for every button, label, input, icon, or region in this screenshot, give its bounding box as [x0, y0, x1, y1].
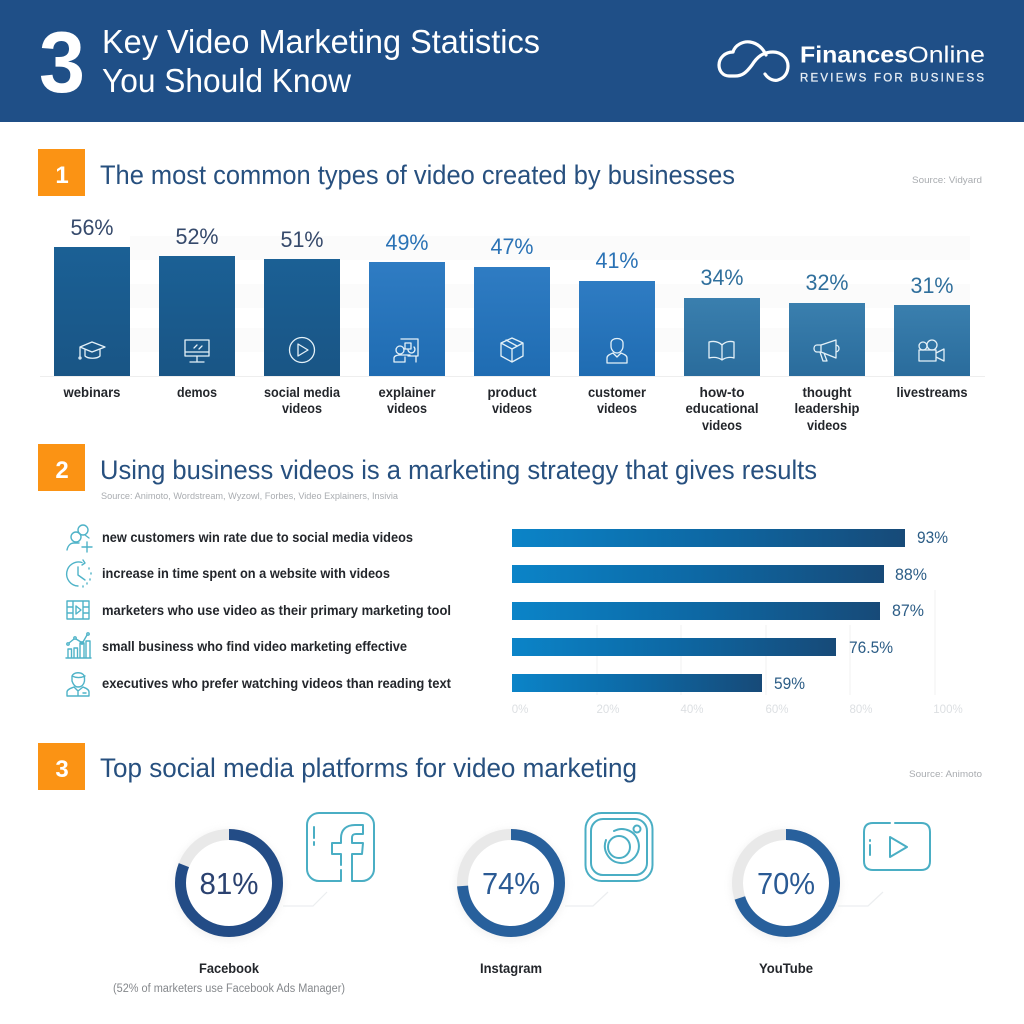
platform: Facebook — [113, 813, 374, 995]
x axis labels: 0% — [512, 704, 528, 716]
bar: demos 52%: 52% — [176, 224, 218, 249]
bar: explainer videos 49%: explainer — [378, 385, 436, 400]
bar chart: types of video — [40, 215, 985, 433]
x axis labels: 60% — [765, 704, 789, 716]
x axis labels: 40% — [680, 704, 704, 716]
header number 3: 3 — [39, 15, 85, 111]
section 2 heading: Using business videos is a marketing strategy that gives results — [100, 455, 817, 485]
bar: livestreams 31% — [894, 273, 970, 400]
donut: 81%: 81% — [200, 866, 258, 901]
icon: growth chart — [66, 633, 91, 658]
section 3 heading: 3 — [55, 756, 69, 783]
bar: social media videos 51%: social media — [264, 385, 340, 400]
icon: Facebook — [307, 813, 374, 881]
donut: 70% — [738, 834, 834, 932]
bar: thought leadership videos 32%: videos — [807, 418, 847, 433]
section 3 heading — [38, 743, 637, 790]
section 1 heading: 1 — [55, 162, 69, 189]
bar: product videos 47%: 47% — [490, 234, 534, 259]
donut: 74% — [462, 834, 560, 932]
bar: explainer videos 49%: 49% — [386, 230, 428, 255]
section 1 heading: The most common types of video created by businesses — [100, 160, 735, 190]
bar: 76.5% — [512, 638, 893, 657]
header banner — [0, 0, 1024, 122]
platform: Instagram — [456, 813, 652, 976]
horizontal bar chart: results — [512, 528, 963, 716]
bar: livestreams 31%: livestreams — [896, 385, 968, 400]
section 3 heading: Top social media platforms for video marketing — [100, 753, 637, 783]
bar: thought leadership videos 32%: thought — [802, 385, 852, 400]
donut: 81% — [180, 834, 278, 932]
section 2 heading — [38, 444, 817, 491]
bar: thought leadership videos 32%: leadership — [794, 401, 860, 416]
list of marketing results: increase in time spent on a website with videos — [102, 566, 390, 581]
source: Animoto, Wordstream and others: Source: Animoto, Wordstream, Wyzowl, Forbes, Video Explainers, Insivia — [101, 491, 399, 502]
bar: product videos 47% — [474, 234, 550, 416]
logo: FinancesOnline: Finances — [800, 42, 908, 68]
donut: 74%: 74% — [482, 866, 540, 901]
bar: social media videos 51%: 51% — [280, 227, 324, 252]
icon: Instagram — [586, 813, 652, 881]
bar: social media videos 51%: videos — [282, 401, 322, 416]
bar: 88% — [512, 565, 927, 584]
bar: product videos 47%: videos — [492, 401, 532, 416]
bar: webinars 56% — [54, 215, 130, 400]
x axis labels: 100% — [933, 704, 963, 716]
bar: 88%: 88% — [895, 565, 927, 584]
bar: 87%: 87% — [892, 601, 924, 620]
platform: Facebook: (52% of marketers use Facebook Ads Manager) — [113, 983, 345, 995]
list of marketing results: executives who prefer watching videos than reading text — [102, 676, 451, 691]
icon: new customers — [67, 525, 92, 552]
bar: thought leadership videos 32% — [789, 270, 865, 433]
platform: YouTube: YouTube — [759, 960, 813, 976]
bar: thought leadership videos 32%: 32% — [806, 270, 848, 295]
icon: film strip — [67, 601, 89, 619]
logo: FinancesOnline — [719, 42, 985, 84]
main title: You Should Know — [102, 62, 351, 99]
icon: clock — [67, 560, 91, 587]
bar: social media videos 51% — [264, 227, 340, 416]
bar: product videos 47%: product — [488, 385, 537, 400]
bar: demos 52%: demos — [177, 385, 217, 400]
bar: 93% — [512, 528, 948, 547]
bar: 87% — [512, 601, 924, 620]
bar: 93%: 93% — [917, 528, 948, 547]
list of marketing results: marketers who use video as their primary marketing tool — [102, 603, 451, 618]
x axis labels — [512, 704, 963, 716]
bar: customer videos 41%: 41% — [596, 248, 638, 273]
bar: demos 52% — [159, 224, 235, 400]
bar: customer videos 41%: videos — [597, 401, 637, 416]
platform: Instagram: Instagram — [480, 960, 542, 976]
logo: FinancesOnline: Online — [908, 42, 985, 68]
icon: executive — [67, 673, 89, 696]
list of marketing results — [66, 525, 451, 696]
main title: Key Video Marketing Statistics — [102, 23, 540, 60]
x axis labels: 20% — [596, 704, 620, 716]
x axis labels: 80% — [849, 704, 873, 716]
bar: how-to educational videos 34%: videos — [702, 418, 742, 433]
bar: explainer videos 49% — [369, 230, 445, 416]
logo: FinancesOnline: REVIEWS FOR BUSINESS — [800, 72, 984, 84]
bar: how-to educational videos 34%: educational — [686, 401, 758, 416]
icon: YouTube — [864, 823, 930, 870]
donut: 70%: 70% — [757, 866, 815, 901]
bar: webinars 56%: webinars — [63, 385, 120, 400]
bar: customer videos 41%: customer — [588, 385, 647, 400]
source: Animoto: Source: Animoto — [909, 769, 982, 780]
bar: customer videos 41% — [579, 248, 655, 416]
bar: how-to educational videos 34%: 34% — [700, 265, 744, 290]
section 1 heading — [38, 149, 735, 196]
source: Vidyard: Source: Vidyard — [912, 175, 982, 186]
platform: YouTube — [731, 823, 930, 976]
bar: livestreams 31%: 31% — [910, 273, 954, 298]
list of marketing results: new customers win rate due to social media videos — [102, 530, 413, 545]
bar: how-to educational videos 34%: how-to — [700, 385, 744, 400]
section 2 heading: 2 — [55, 457, 69, 484]
bar: explainer videos 49%: videos — [387, 401, 427, 416]
bar: 76.5%: 76.5% — [849, 638, 893, 657]
bar: webinars 56%: 56% — [70, 215, 114, 240]
bar: 59%: 59% — [774, 674, 805, 693]
bar: 59% — [512, 674, 805, 693]
list of marketing results: small business who find video marketing effective — [102, 639, 407, 654]
platform: Facebook: Facebook — [199, 960, 259, 976]
bar: how-to educational videos 34% — [684, 265, 760, 433]
